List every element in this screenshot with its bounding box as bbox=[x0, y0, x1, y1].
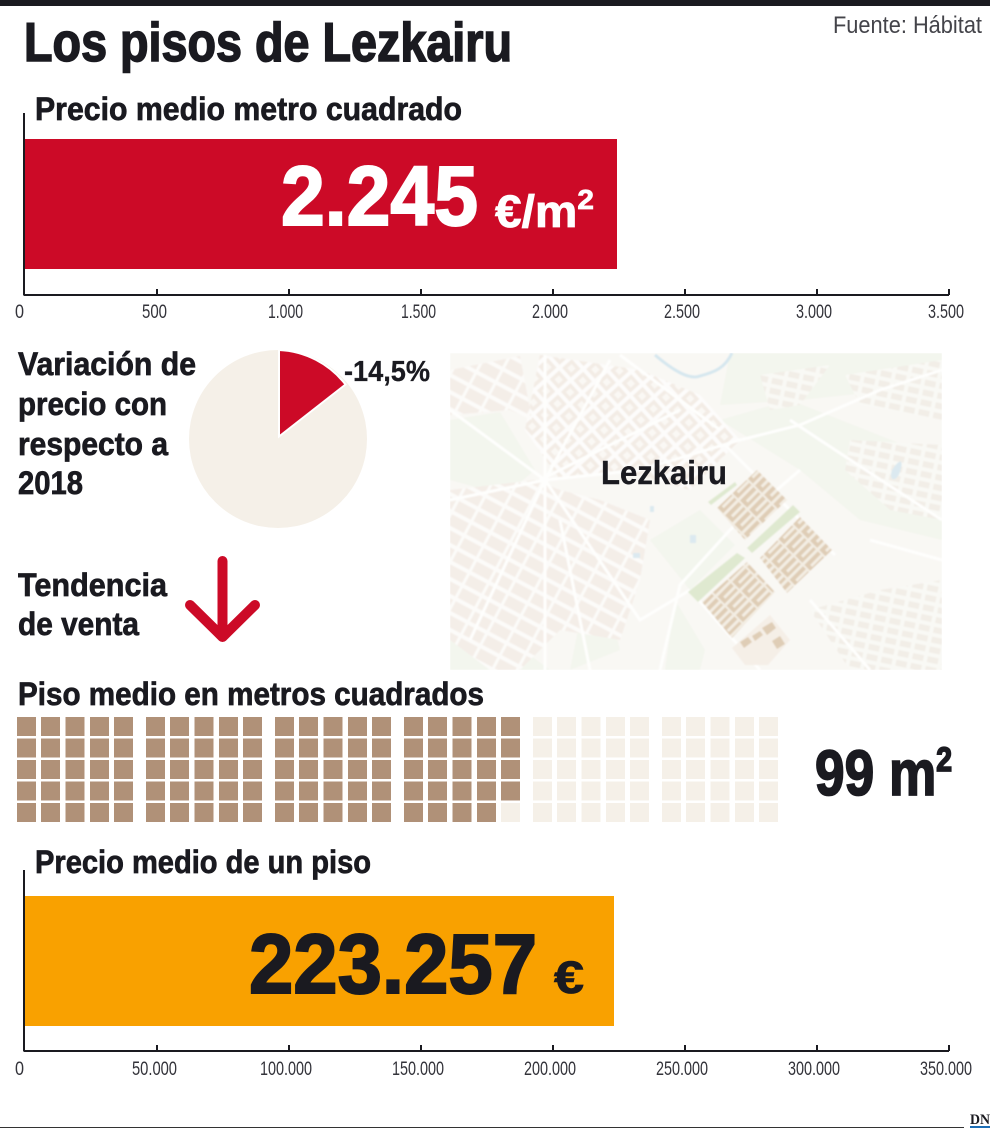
value: average flat size: 99 m bbox=[815, 737, 961, 809]
axis: price per square metre: 0 bbox=[15, 302, 24, 323]
panel: price per square metre bbox=[15, 91, 964, 323]
axis: price per square metre: 1.500 bbox=[401, 302, 436, 323]
axis: average flat price: 150.000 bbox=[392, 1059, 444, 1080]
value: average flat price: 223.257 bbox=[249, 917, 537, 1011]
heading: average flat price: Precio medio de un piso bbox=[35, 844, 371, 880]
heading: average flat size: Piso medio en metros cuadrados bbox=[18, 676, 484, 712]
heading: price variation: respecto a bbox=[18, 426, 168, 462]
map: central grid blocks bbox=[525, 355, 740, 490]
unit: euros per square metre: €/m bbox=[495, 186, 573, 237]
panel: average flat size bbox=[17, 676, 952, 822]
map: old town blocks bbox=[450, 356, 532, 420]
unit: euros per square metre: 2 bbox=[577, 184, 594, 215]
heading: price variation: precio con bbox=[18, 386, 167, 422]
map: west blocks bbox=[450, 480, 650, 670]
map: Lezkairu blocks bbox=[702, 470, 832, 638]
pie chart: price variation bbox=[189, 349, 367, 528]
axis: average flat price: 50.000 bbox=[132, 1059, 177, 1080]
map: green boulevards bbox=[688, 482, 800, 602]
heading: price variation bbox=[18, 346, 196, 501]
axis: average flat price: 200.000 bbox=[524, 1059, 576, 1080]
heading: price variation: 2018 bbox=[18, 465, 83, 501]
panel: average flat price bbox=[15, 844, 972, 1080]
panel: map of Lezkairu bbox=[450, 353, 942, 670]
value: average flat size: 2 bbox=[936, 741, 952, 779]
map: green areas bbox=[450, 353, 942, 670]
axis: average flat price: 350.000 bbox=[920, 1059, 972, 1080]
axis: average flat price: 300.000 bbox=[788, 1059, 840, 1080]
waffle chart: filled squares bbox=[17, 717, 520, 822]
axis: price per square metre bbox=[15, 113, 964, 323]
heading: sales trend: de venta bbox=[18, 606, 139, 642]
title: Los pisos de Lezkairu bbox=[24, 11, 512, 73]
value: price variation: -14,5% bbox=[344, 356, 430, 388]
map base bbox=[450, 353, 942, 670]
bar: price per square metre bbox=[25, 139, 617, 269]
map: river bbox=[655, 353, 732, 377]
unit: euros: € bbox=[554, 952, 584, 1003]
bar: average flat price bbox=[25, 896, 614, 1026]
map: ponds bbox=[633, 462, 902, 558]
map label: Lezkairu bbox=[601, 454, 727, 491]
footer rule bbox=[0, 1127, 964, 1128]
heading: price per square metre: Precio medio metro cuadrado bbox=[35, 91, 462, 127]
axis: price per square metre: 2.000 bbox=[532, 302, 568, 323]
value: price per square metre: 2.245 bbox=[281, 149, 478, 243]
axis: average flat price: 0 bbox=[15, 1059, 24, 1080]
axis: price per square metre: 500 bbox=[142, 302, 167, 323]
arrow: downward trend bbox=[190, 561, 255, 637]
top rule bbox=[0, 0, 990, 6]
axis: average flat price: 100.000 bbox=[260, 1059, 312, 1080]
axis: average flat price bbox=[15, 870, 972, 1080]
panel: sales trend bbox=[18, 561, 255, 642]
axis: price per square metre: 1.000 bbox=[268, 302, 303, 323]
map: Lezkairu southern plots bbox=[732, 615, 790, 665]
heading: sales trend bbox=[18, 567, 167, 642]
panel: price variation bbox=[18, 346, 430, 528]
axis: average flat price: 250.000 bbox=[656, 1059, 708, 1080]
heading: sales trend: Tendencia bbox=[18, 567, 167, 603]
axis: price per square metre: 2.500 bbox=[664, 302, 700, 323]
map: eastern blocks bbox=[760, 360, 942, 670]
waffle chart: empty squares bbox=[501, 717, 778, 822]
axis: price per square metre: 3.000 bbox=[796, 302, 832, 323]
axis: price per square metre: 3.500 bbox=[928, 302, 964, 323]
heading: price variation: Variación de bbox=[18, 346, 196, 382]
map artwork bbox=[450, 353, 942, 670]
map: major roads bbox=[450, 355, 942, 670]
